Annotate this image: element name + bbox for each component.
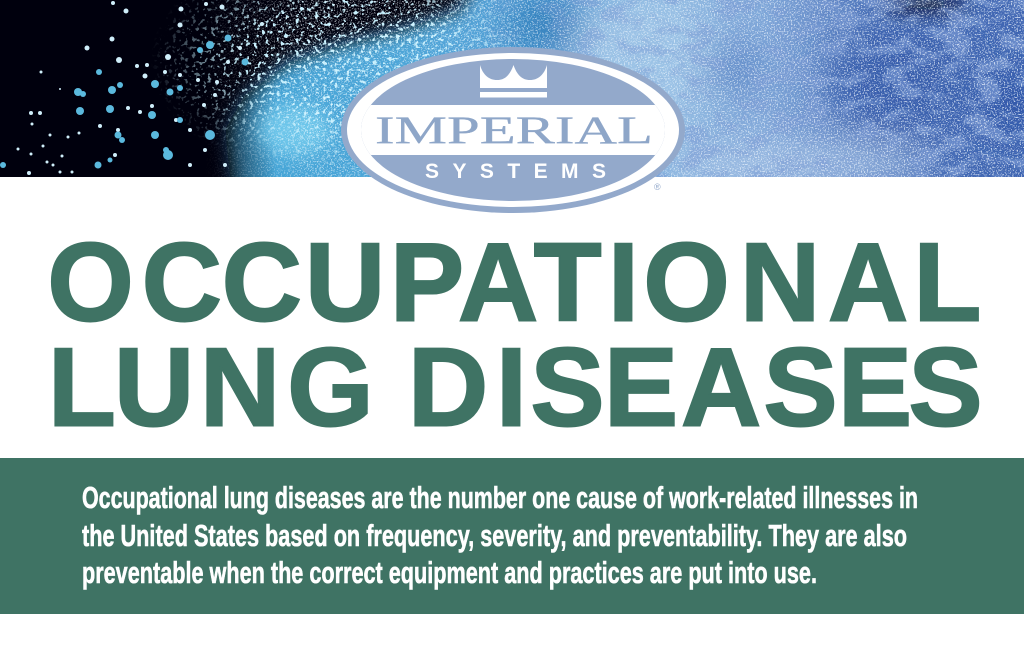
panel: intro band	[0, 458, 1024, 614]
logo white ring	[347, 53, 679, 207]
banner: powder explosion photo	[0, 0, 1024, 177]
dark background behind the particles	[0, 0, 482, 177]
logo wordmark: Systems: SYSTEMS	[425, 160, 606, 183]
fine powder speckle	[210, 0, 1024, 177]
intro text	[82, 480, 918, 590]
mottled cloud texture	[513, 0, 1024, 177]
registered mark: ®	[654, 182, 661, 192]
title	[47, 220, 983, 450]
logo white band	[347, 105, 679, 155]
scattered particles	[16, 1, 264, 175]
logo wordmark: Imperial: IMPERIAL	[375, 109, 653, 152]
coarse particle cloud	[154, 0, 540, 176]
icon: crown	[480, 65, 547, 98]
logo: Imperial Systems oval	[341, 47, 685, 213]
logo inner field	[361, 59, 665, 201]
logo outer ring	[341, 47, 685, 213]
title line 1: OCCUPATIONAL	[47, 220, 981, 344]
title line 2: LUNG DISEASES	[48, 326, 983, 450]
